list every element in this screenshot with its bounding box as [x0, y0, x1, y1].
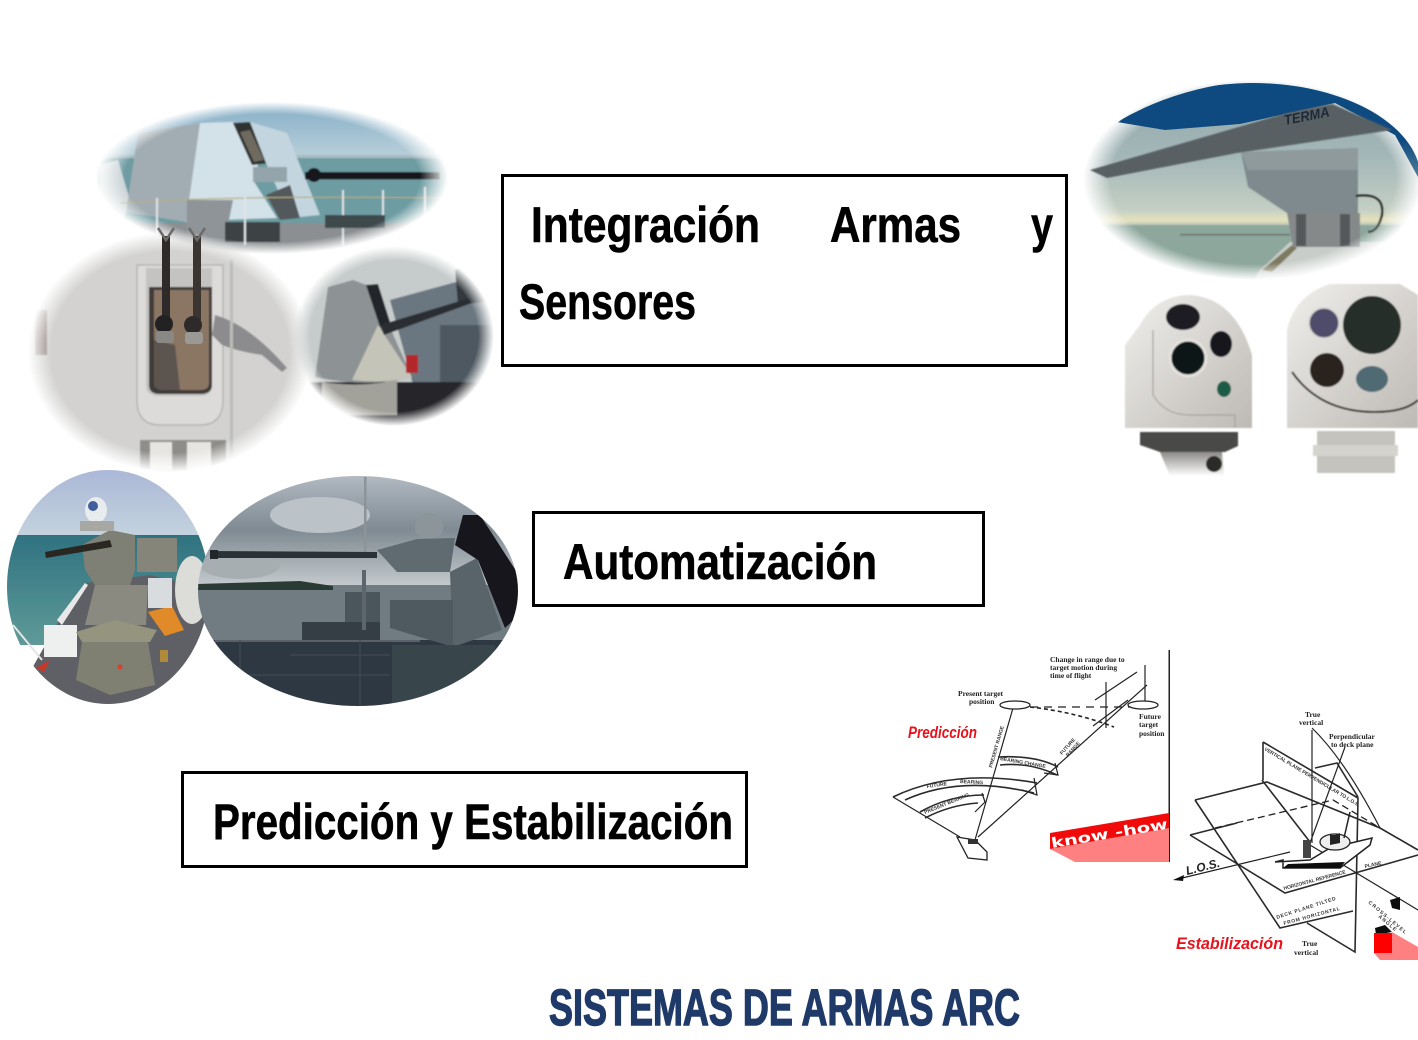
- diagram: stabilization: ANGLE: [1377, 914, 1398, 933]
- diagram: prediction: BEARING CHANGE: [1000, 756, 1047, 770]
- photo: radar antenna beam: [1090, 104, 1392, 178]
- diagram: prediction: position: [1139, 729, 1165, 738]
- photo: electro-optical sensor right: [1287, 284, 1418, 473]
- photo: naval gun and overcast sea: [195, 475, 522, 710]
- photo: twin barrel turret close-up: [32, 236, 306, 470]
- diagram: stabilization: vertical: [1299, 718, 1323, 727]
- diagram: stabilization: Perpendicular: [1329, 732, 1375, 741]
- diagram: stabilization: [1173, 710, 1418, 957]
- diagram: prediction: position: [969, 697, 995, 706]
- marker: red block: [1374, 932, 1418, 960]
- diagram: prediction: FUTURE: [1059, 737, 1077, 756]
- diagram: stabilization: HORIZONTAL REFERENCE: [1283, 869, 1347, 892]
- photo: electro-optical sensor left: [1125, 295, 1252, 476]
- diagram: prediction: target motion during: [1050, 663, 1117, 672]
- label: Estabilización: Estabilización: [1176, 934, 1283, 953]
- photo: grey turret with dark ship: [298, 248, 493, 426]
- diagram: prediction: BEARING: [960, 779, 983, 786]
- diagram: stabilization: vertical: [1294, 948, 1318, 957]
- box: Automatización: [534, 512, 984, 606]
- icon: twin gun barrels: [155, 228, 205, 344]
- photo: remote weapon station on deck: [7, 470, 206, 704]
- box: Integración Armas y Sensores: y: [1031, 197, 1053, 253]
- box: Integración Armas y Sensores: Sensores: [519, 274, 696, 330]
- photo: blue sky band of radar image: [1118, 83, 1418, 177]
- diagram: prediction: Present target: [958, 689, 1004, 698]
- diagram: stabilization: True: [1302, 939, 1318, 948]
- diagram: stabilization: True: [1305, 710, 1321, 719]
- banner: know-how: [1050, 813, 1169, 862]
- box: Predicción y Estabilización: Predicción y Estabilización: [213, 794, 733, 850]
- box: Automatización: Automatización: [563, 534, 877, 590]
- box: Predicción y Estabilización: [182, 772, 746, 866]
- box: Integración Armas y Sensores: Armas: [830, 197, 961, 253]
- diagram: prediction: Future: [1139, 712, 1162, 721]
- diagram: stabilization: L.O.S.: [1184, 856, 1221, 878]
- diagram: prediction: PRESENT BEARING: [924, 792, 970, 816]
- label: Predicción: Predicción: [908, 723, 977, 742]
- diagram: stabilization: to deck plane: [1331, 740, 1374, 749]
- diagram: prediction: RANGE: [1065, 740, 1082, 758]
- diagram: prediction: time of flight: [1050, 671, 1092, 680]
- banner: know-how: know -how: [1050, 817, 1169, 852]
- photo: naval gun turret on deck: [98, 103, 446, 253]
- diagram: prediction: FUTURE: [926, 781, 948, 790]
- diagram: stabilization: FROM HORIZONTAL: [1283, 906, 1341, 927]
- box: Integración Armas y Sensores: [502, 176, 1066, 366]
- diagram: prediction: PRESENT RANGE: [988, 725, 1006, 769]
- diagram: prediction: target: [1139, 720, 1159, 729]
- diagram: stabilization: VERTICAL PLANE PERPENDICULAR TO L.O.S.: [1263, 747, 1361, 809]
- label: TERMA on radar: TERMA: [1283, 103, 1331, 128]
- diagram: prediction: [893, 655, 1165, 860]
- title: SISTEMAS DE ARMAS ARC: [549, 979, 1020, 1036]
- diagram: stabilization: DECK PLANE TILTED: [1276, 896, 1337, 921]
- diagram: stabilization: PLANE: [1364, 860, 1383, 870]
- diagram: prediction: Change in range due to: [1050, 655, 1125, 664]
- diagram: stabilization: CROSS-LEVEL: [1367, 900, 1407, 935]
- box: Integración Armas y Sensores: Integración: [531, 197, 760, 253]
- divider: vertical rule: [1168, 650, 1170, 862]
- photo: TERMA radar antenna: [1086, 81, 1418, 279]
